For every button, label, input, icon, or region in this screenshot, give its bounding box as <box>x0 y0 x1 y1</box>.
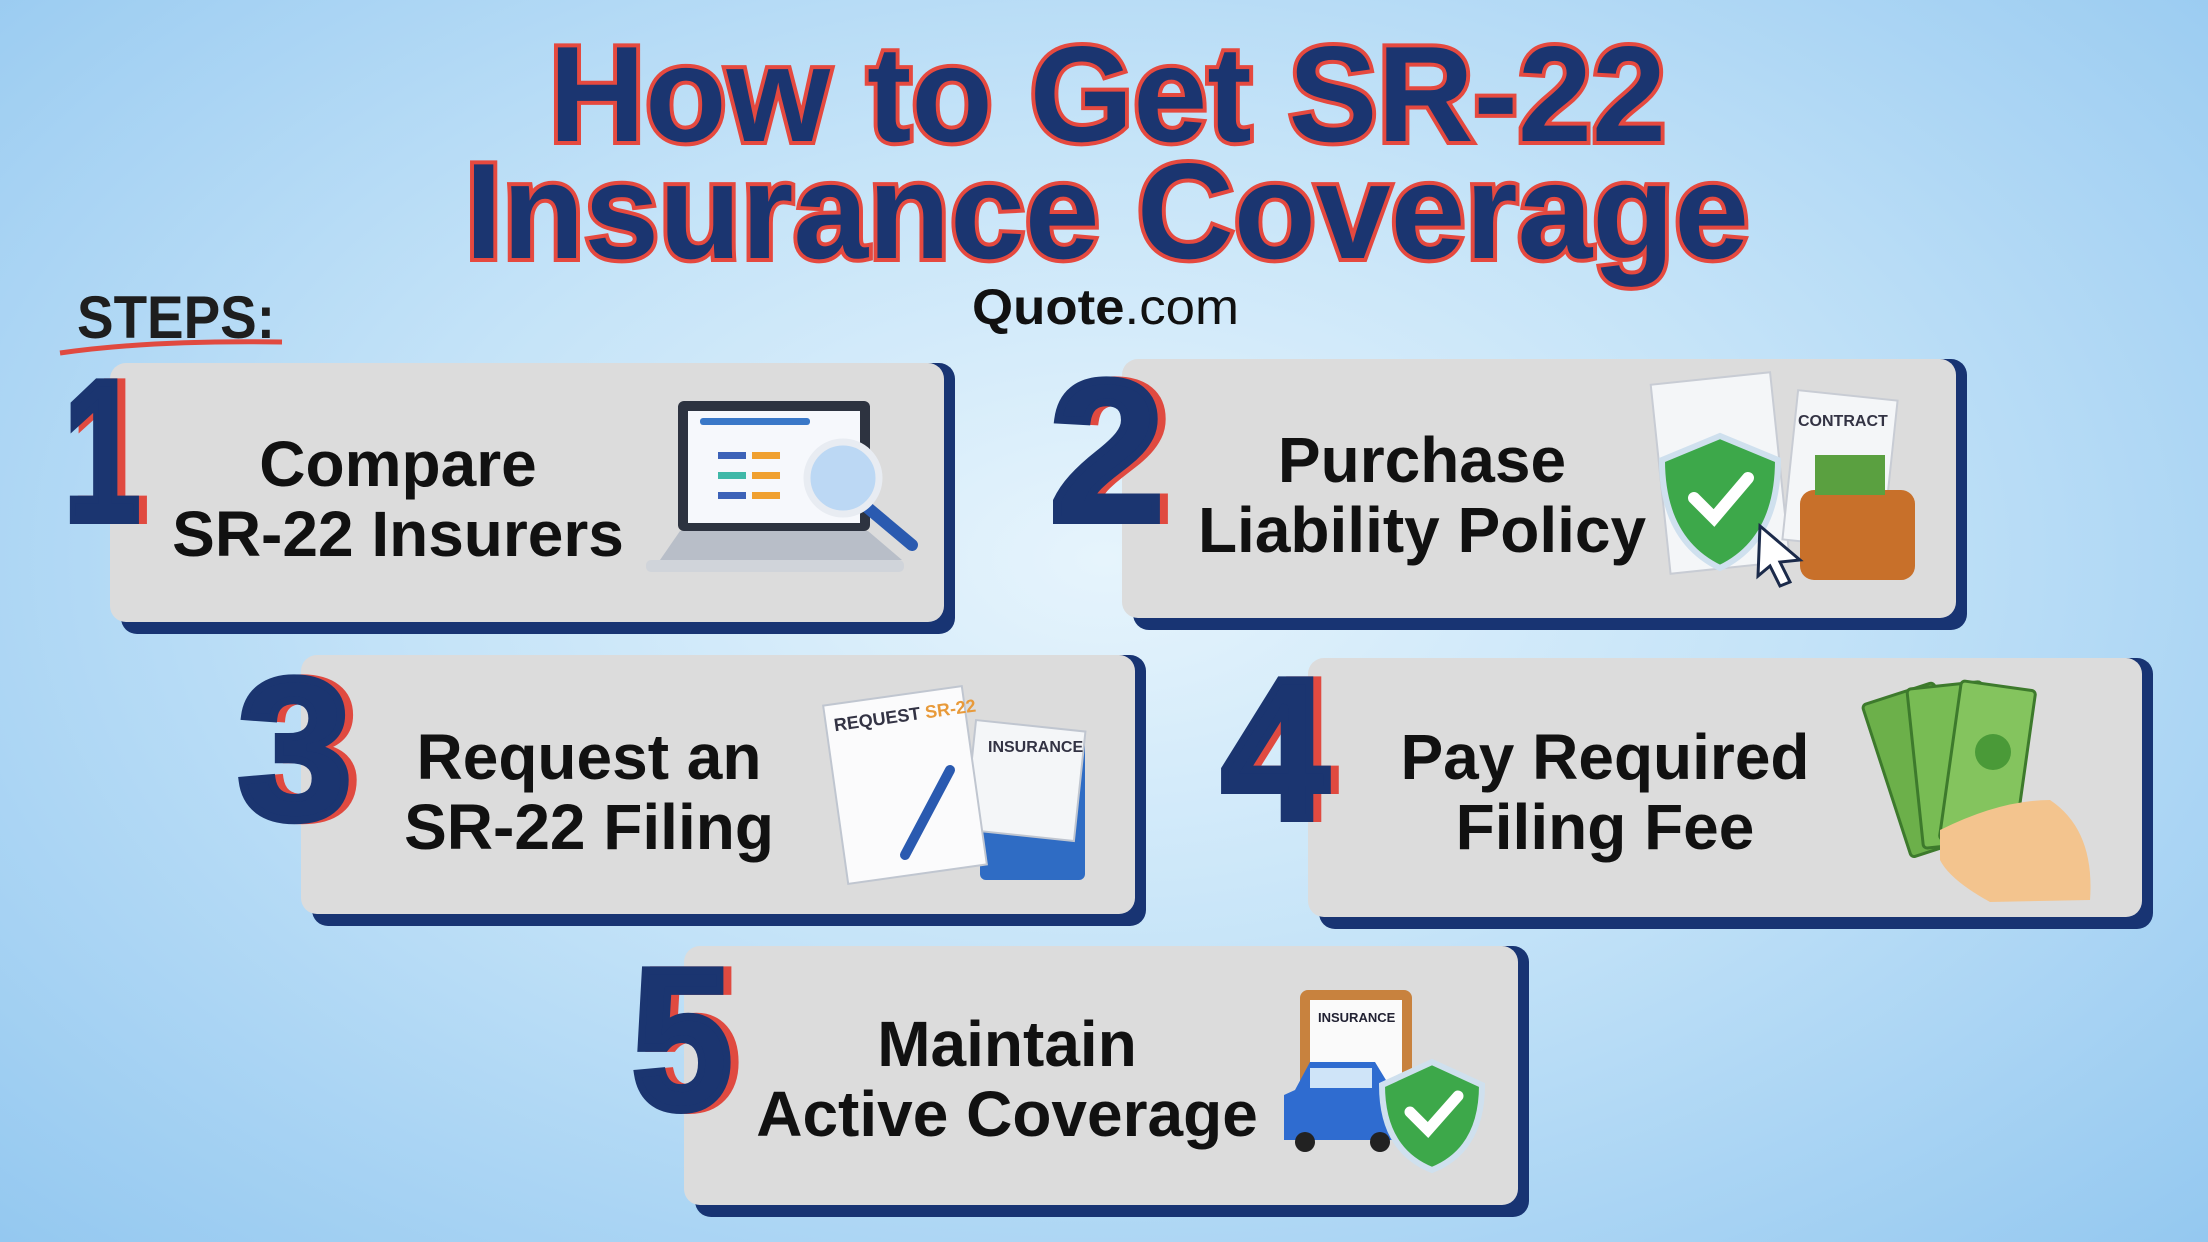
panel: step 3 <box>238 638 1146 926</box>
icon: request form and folder: INSURANCE <box>988 739 1083 756</box>
icon: request form and folder: REQUEST SR-22 <box>833 695 977 735</box>
number 5: 5 <box>632 928 732 1151</box>
logo: Quote.com: Quote.com <box>972 279 1239 335</box>
text: Compare SR-22 Insurers: Compare <box>259 428 537 500</box>
text: Pay Required Filing Fee: Filing Fee <box>1456 791 1754 863</box>
title: How to Get SR-22 <box>549 18 1666 170</box>
icon: hand with cash <box>1862 681 2090 902</box>
number 2: 2 <box>1058 340 1172 563</box>
number 4: 4 <box>1230 638 1336 861</box>
text: Request an SR-22 Filing <box>404 721 774 863</box>
icon: contract, shield, wallet <box>1651 372 1915 586</box>
panel: step 1 <box>64 340 955 634</box>
icon: laptop with magnifier <box>646 401 912 572</box>
title <box>465 18 1749 287</box>
icon: car, clipboard, shield: INSURANCE <box>1318 1010 1396 1025</box>
heading: STEPS: STEPS: <box>77 284 275 351</box>
number 5: 5 <box>640 928 740 1151</box>
text: Compare SR-22 Insurers: SR-22 Insurers <box>172 498 624 570</box>
number 1: 1 <box>72 340 148 563</box>
text: Maintain Active Coverage: Active Coverage <box>756 1078 1258 1150</box>
text: Purchase Liability Policy <box>1198 424 1646 566</box>
text: Purchase Liability Policy: Purchase <box>1278 424 1566 496</box>
text: Compare SR-22 Insurers <box>172 428 624 570</box>
icon: car, clipboard, shield <box>1284 990 1482 1170</box>
text: Pay Required Filing Fee <box>1400 721 1810 863</box>
panel: step 4 <box>1222 638 2153 929</box>
number 4: 4 <box>1222 638 1328 861</box>
number 1: 1 <box>64 340 140 563</box>
panel: step 5 <box>632 928 1529 1217</box>
number 2: 2 <box>1050 340 1164 563</box>
number 3: 3 <box>238 638 352 861</box>
icon: request form and folder <box>823 686 1085 884</box>
text: Purchase Liability Policy: Liability Policy <box>1198 494 1646 566</box>
text: Pay Required Filing Fee: Pay Required <box>1400 721 1810 793</box>
text: Request an SR-22 Filing: SR-22 Filing <box>404 791 774 863</box>
panel: step 2 <box>1050 340 1967 630</box>
text: Request an SR-22 Filing: Request an <box>417 721 761 793</box>
text: Maintain Active Coverage: Maintain <box>877 1008 1137 1080</box>
text: Maintain Active Coverage <box>756 1008 1258 1150</box>
number 3: 3 <box>246 638 360 861</box>
title: Insurance Coverage <box>465 135 1749 287</box>
icon: contract, shield, wallet: CONTRACT <box>1798 413 1888 430</box>
